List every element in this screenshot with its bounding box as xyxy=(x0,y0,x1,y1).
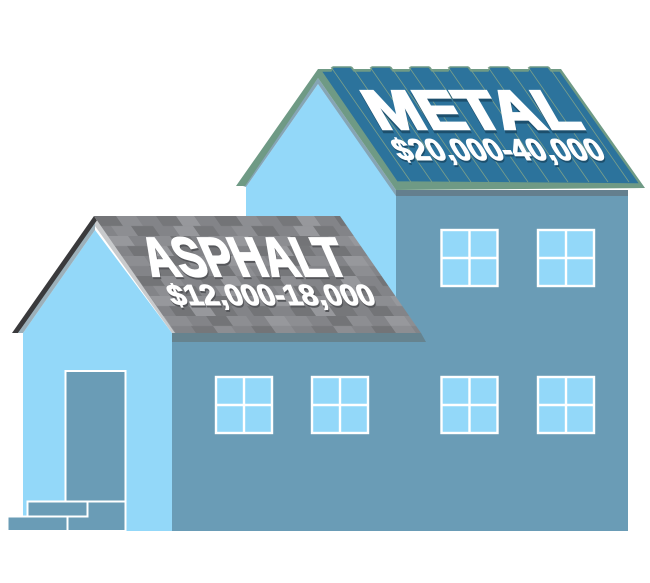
panel seams xyxy=(331,67,629,182)
asphalt label: ASPHALT xyxy=(130,227,358,288)
metal label: $20,000-40,000 xyxy=(384,133,612,166)
door xyxy=(66,371,126,531)
window lower 1 xyxy=(216,377,272,433)
steps xyxy=(8,502,126,531)
metal label xyxy=(350,79,613,168)
metal label: METAL xyxy=(351,82,594,144)
roof shadow xyxy=(172,333,426,342)
asphalt label: ASPHALT xyxy=(131,229,359,290)
lower house wall xyxy=(23,230,396,531)
windows xyxy=(216,230,594,433)
asphalt label: $12,000-18,000 xyxy=(162,279,381,312)
window upper left xyxy=(442,230,498,286)
asphalt label xyxy=(130,227,382,314)
metal roof xyxy=(236,67,645,196)
window upper right xyxy=(538,230,594,286)
asphalt roof xyxy=(12,216,426,342)
dark eave xyxy=(12,216,98,333)
window lower 3 xyxy=(442,377,498,433)
metal label: $20,000-40,000 xyxy=(385,135,613,168)
roof trim and shadow xyxy=(243,78,396,196)
upper house wall xyxy=(172,84,628,531)
asphalt label: $12,000-18,000 xyxy=(163,281,382,314)
corrugated metal panels xyxy=(321,67,640,184)
shingles xyxy=(94,216,421,333)
window lower 4 xyxy=(538,377,594,433)
window lower 2 xyxy=(312,377,368,433)
metal label: METAL xyxy=(350,79,593,141)
